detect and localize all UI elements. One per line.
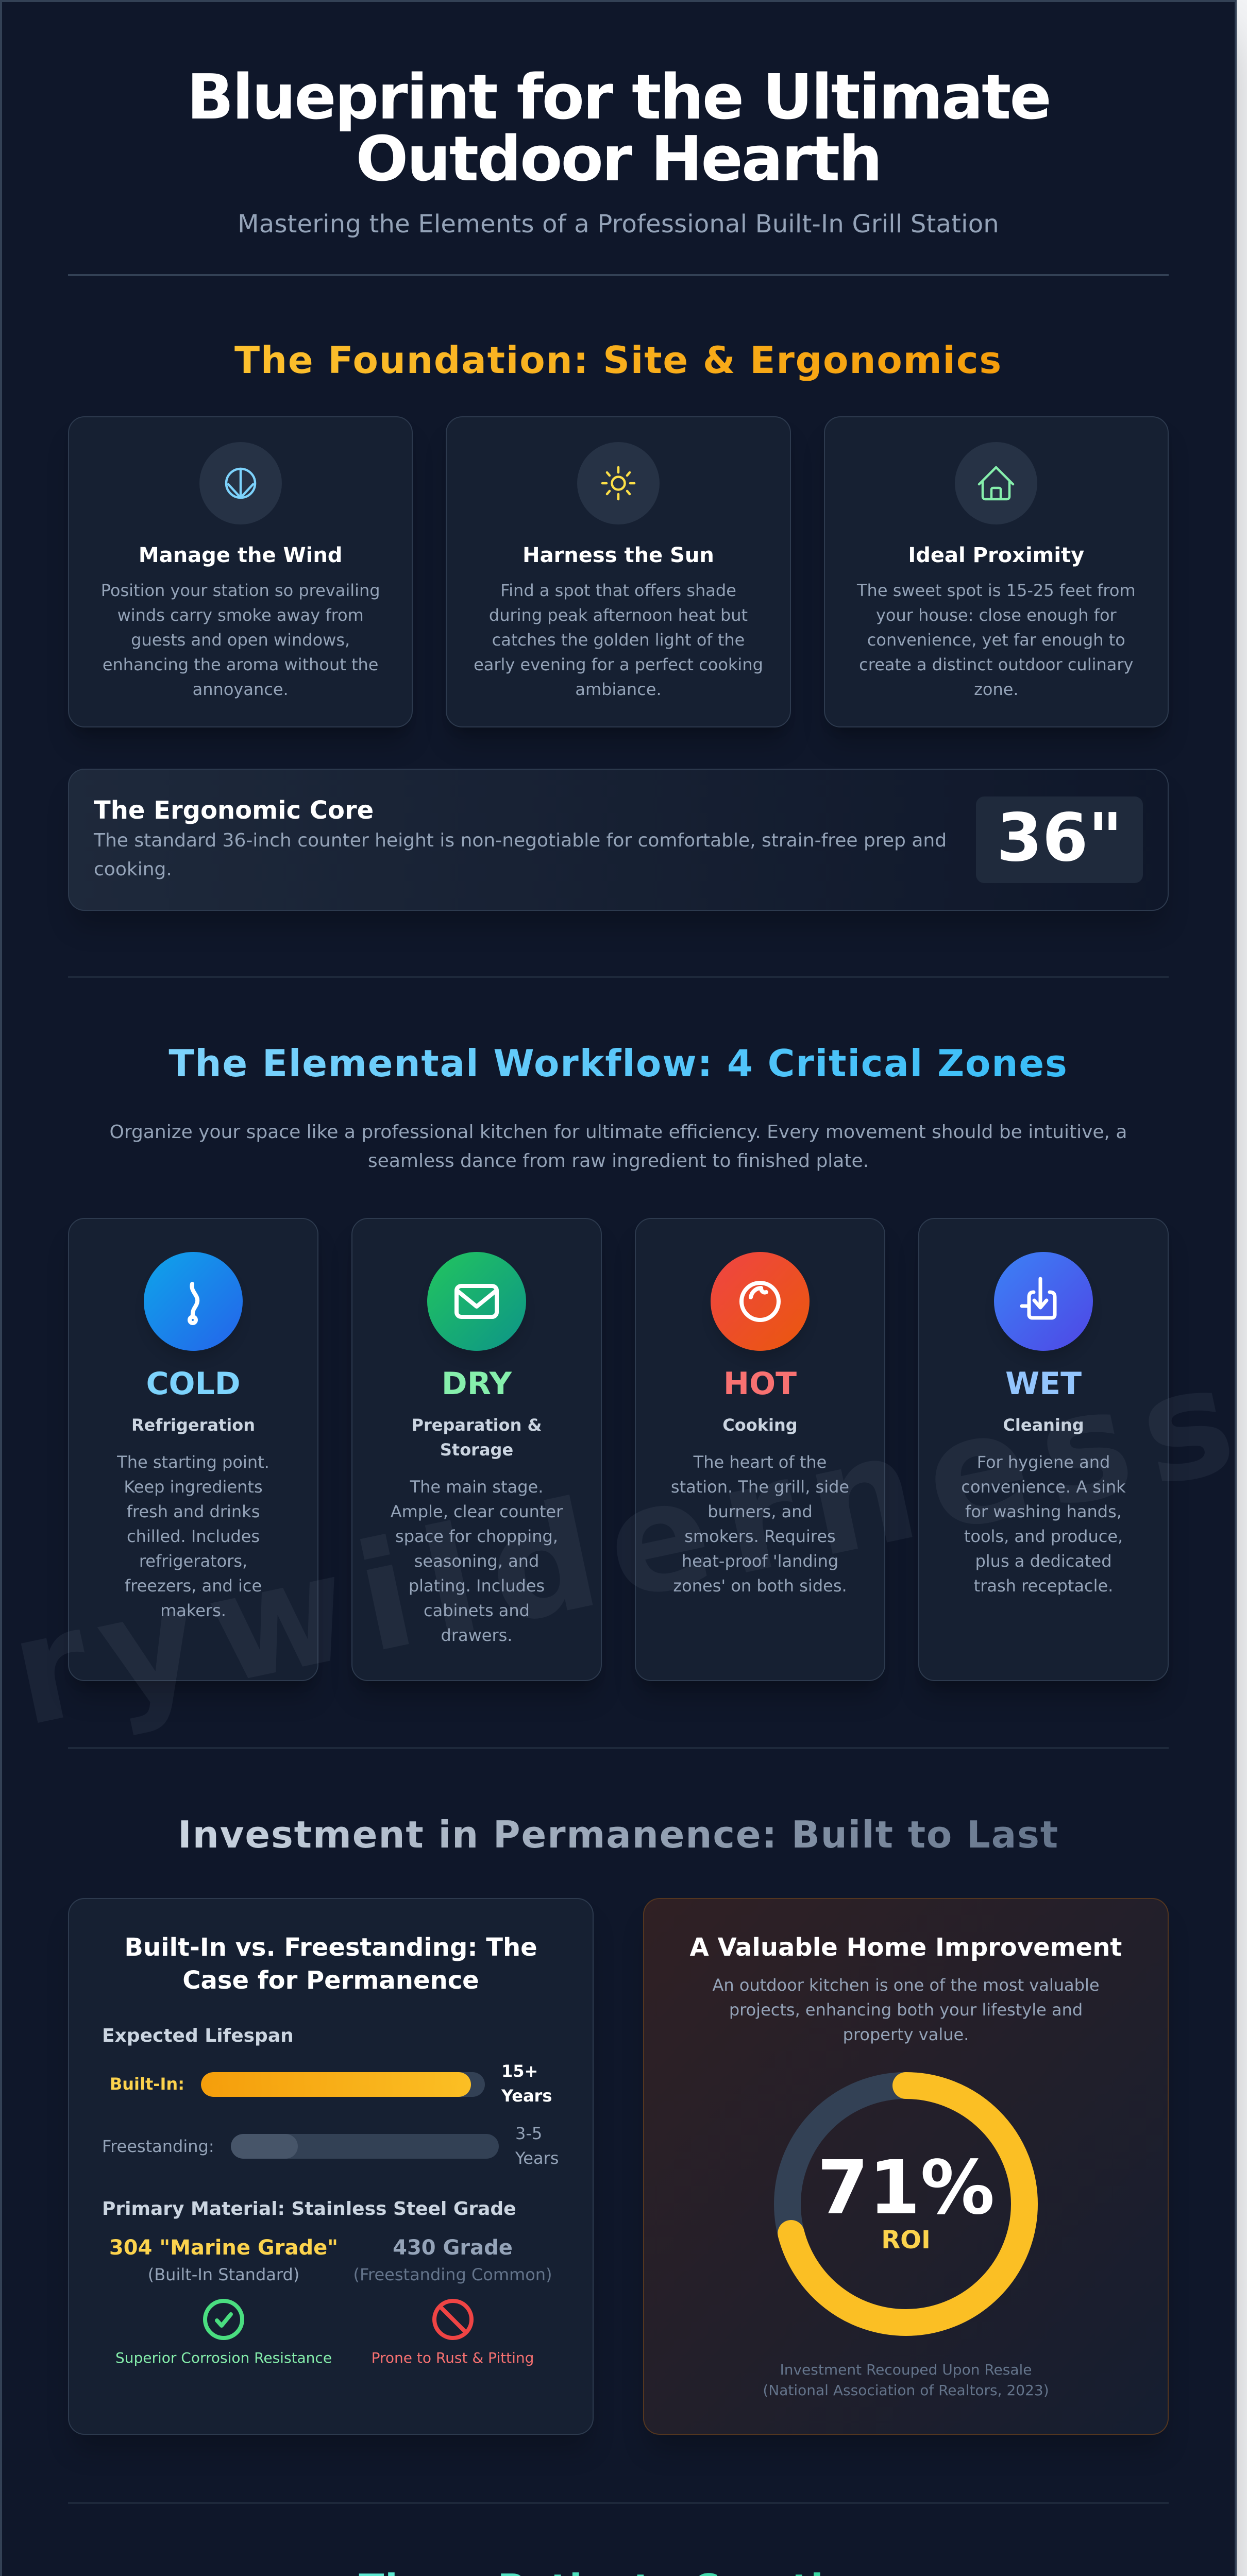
grade name: 304 "Marine Grade": [109, 2236, 338, 2260]
card: manage the wind: [68, 416, 413, 727]
card: hot zone: [635, 1218, 885, 1681]
zone text: burners, and: [707, 1502, 813, 1521]
zone text: [671, 1452, 849, 1596]
icon: sink download: [994, 1252, 1093, 1351]
heading: the foundation: The Foundation: Site & Ergonomics: [234, 338, 1002, 382]
card text: enhancing the aroma without the: [103, 655, 378, 674]
donut chart: 71 percent: [774, 2072, 1038, 2336]
zone text: [391, 1477, 563, 1645]
zone function: Cleaning: [1003, 1415, 1084, 1435]
panel text: The standard 36-inch counter height is non-negotiable for comfortable, strain-free prep and: [94, 830, 947, 851]
card text: [474, 581, 763, 699]
zone text: cabinets and: [424, 1601, 530, 1620]
zone text: The main stage.: [410, 1477, 543, 1497]
grade result: Superior Corrosion Resistance: [115, 2349, 332, 2366]
card text: winds carry smoke away from: [117, 605, 364, 625]
title: [187, 62, 1050, 195]
card: wet zone: [918, 1218, 1169, 1681]
zone text: freezers, and ice: [125, 1576, 262, 1596]
heading: elemental workflow: The Elemental Workflow: 4 Critical Zones: [168, 1042, 1068, 1085]
card: dry zone: [351, 1218, 602, 1681]
zone name: COLD: [146, 1366, 241, 1402]
icon: wind: [199, 442, 282, 524]
source note: Investment Recouped Upon Resale: [780, 2361, 1032, 2378]
column: 304 grade: [109, 2236, 338, 2366]
zone text: zones' on both sides.: [673, 1576, 847, 1596]
stat label: ROI: ROI: [881, 2226, 931, 2255]
panel heading: Case for Permanence: [182, 1966, 479, 1995]
icon: check: [203, 2299, 244, 2340]
card text: The sweet spot is 15-25 feet from: [857, 581, 1136, 600]
title: Outdoor Hearth: [356, 124, 881, 195]
zone text: The starting point.: [117, 1452, 269, 1472]
zone text: Keep ingredients: [124, 1477, 263, 1497]
zone text: Ample, clear counter: [391, 1502, 563, 1521]
zone text: chilled. Includes: [127, 1527, 260, 1546]
card heading: Harness the Sun: [523, 544, 714, 567]
panel: built-in vs freestanding: [68, 1898, 594, 2435]
zone text: [117, 1452, 269, 1620]
panel text: cooking.: [94, 859, 172, 880]
value: built-in years: 15+: [501, 2061, 538, 2081]
icon: sun: [577, 442, 660, 524]
zone text: plating. Includes: [409, 1576, 545, 1596]
label: expected lifespan: Expected Lifespan: [102, 2025, 294, 2046]
card text: ambiance.: [575, 680, 662, 699]
panel heading: Built-In vs. Freestanding: The: [124, 1933, 537, 1962]
panel text: An outdoor kitchen is one of the most valuable: [712, 1975, 1100, 1995]
icon: thermometer: [144, 1252, 243, 1351]
intro text: [109, 1122, 1127, 1172]
card text: during peak afternoon heat but: [489, 605, 748, 625]
panel text: property value.: [843, 2025, 969, 2044]
card heading: Manage the Wind: [139, 544, 342, 567]
zone text: [961, 1452, 1126, 1596]
panel text: [94, 830, 947, 880]
zone text: plus a dedicated: [975, 1551, 1112, 1571]
column: 430 grade: [334, 2233, 571, 2368]
zone text: trash receptacle.: [974, 1576, 1113, 1596]
zone name: WET: [1005, 1366, 1082, 1402]
label: built-in: Built-In:: [110, 2074, 184, 2094]
value: freestanding years: [515, 2124, 559, 2168]
zone text: makers.: [160, 1601, 226, 1620]
bar: built-in lifespan: [201, 2072, 485, 2097]
value: built-in years: [501, 2061, 552, 2106]
zone text: for washing hands,: [965, 1502, 1122, 1521]
title: Blueprint for the Ultimate: [187, 62, 1050, 133]
zone text: The heart of the: [694, 1452, 827, 1472]
intro text: Organize your space like a professional kitchen for ultimate efficiency. Every movement should be intuitive, a: [109, 1122, 1127, 1143]
subtitle: Mastering the Elements of a Professional Built-In Grill Station: [238, 210, 999, 239]
grade result: Prone to Rust & Pitting: [372, 2349, 534, 2366]
card heading: Ideal Proximity: [908, 544, 1084, 567]
zone text: seasoning, and: [414, 1551, 539, 1571]
panel: valuable home improvement: [643, 1898, 1169, 2435]
panel heading: A Valuable Home Improvement: [690, 1933, 1122, 1962]
bar: freestanding lifespan: [231, 2134, 499, 2159]
zone text: For hygiene and: [977, 1452, 1110, 1472]
stat: 36 inches: [976, 796, 1143, 883]
zone text: heat-proof 'landing: [682, 1551, 838, 1571]
zone text: smokers. Requires: [684, 1527, 836, 1546]
stat: 36 inches: 36": [997, 800, 1122, 876]
grade note: (Freestanding Common): [353, 2265, 552, 2284]
panel heading: The Ergonomic Core: [94, 796, 374, 825]
watermark text: rywilderness: [0, 1330, 1237, 1760]
zone text: refrigerators,: [139, 1551, 247, 1571]
label: primary material: Primary Material: Stainless Steel Grade: [102, 2198, 516, 2219]
zone text: tools, and produce,: [964, 1527, 1123, 1546]
card: ideal proximity: [824, 416, 1169, 727]
zone function: Preparation &: [412, 1415, 542, 1435]
heading: investment in permanence: Investment in Permanence: Built to Last: [178, 1813, 1059, 1856]
label: freestanding: Freestanding:: [102, 2137, 214, 2156]
zone text: space for chopping,: [395, 1527, 558, 1546]
icon: ban: [432, 2299, 473, 2340]
stat: 71 percent: 71%: [817, 2144, 995, 2231]
grade note: (Built-In Standard): [148, 2265, 299, 2284]
card text: create a distinct outdoor culinary: [859, 655, 1133, 674]
icon: envelope: [427, 1252, 526, 1351]
value: freestanding years: 3-5: [515, 2124, 542, 2143]
card text: zone.: [974, 680, 1019, 699]
card text: Find a spot that offers shade: [500, 581, 736, 600]
card text: annoyance.: [193, 680, 289, 699]
card text: convenience, yet far enough to: [867, 630, 1125, 650]
card: cold zone: [68, 1218, 318, 1681]
icon: flame: [711, 1252, 810, 1351]
card text: Position your station so prevailing: [101, 581, 380, 600]
card text: your house: close enough for: [876, 605, 1117, 625]
zone text: station. The grill, side: [671, 1477, 849, 1497]
zone function: Storage: [440, 1440, 513, 1460]
card text: [856, 581, 1136, 699]
icon: house: [955, 442, 1037, 524]
card text: early evening for a perfect cooking: [474, 655, 763, 674]
card: harness the sun: [446, 416, 791, 727]
zone text: fresh and drinks: [127, 1502, 260, 1521]
panel heading: [124, 1933, 537, 1995]
source note: (National Association of Realtors, 2023): [763, 2382, 1049, 2399]
value: freestanding years: Years: [515, 2148, 559, 2168]
intro text: seamless dance from raw ingredient to finished plate.: [368, 1150, 869, 1172]
zone name: HOT: [723, 1366, 797, 1402]
zone name: DRY: [442, 1366, 512, 1402]
zone function: [412, 1415, 542, 1460]
zone function: Cooking: [722, 1415, 798, 1435]
card text: guests and open windows,: [131, 630, 350, 650]
zone function: Refrigeration: [131, 1415, 255, 1435]
source note: [643, 2360, 1169, 2401]
card text: [101, 581, 380, 699]
panel text: projects, enhancing both your lifestyle and: [729, 2000, 1083, 2020]
value: built-in years: Years: [501, 2086, 552, 2106]
zone text: drawers.: [441, 1625, 512, 1645]
zone text: convenience. A sink: [961, 1477, 1126, 1497]
grade name: 430 Grade: [393, 2236, 513, 2260]
panel text: [643, 1973, 1169, 2047]
panel: the ergonomic core: [68, 769, 1169, 911]
card text: catches the golden light of the: [492, 630, 745, 650]
